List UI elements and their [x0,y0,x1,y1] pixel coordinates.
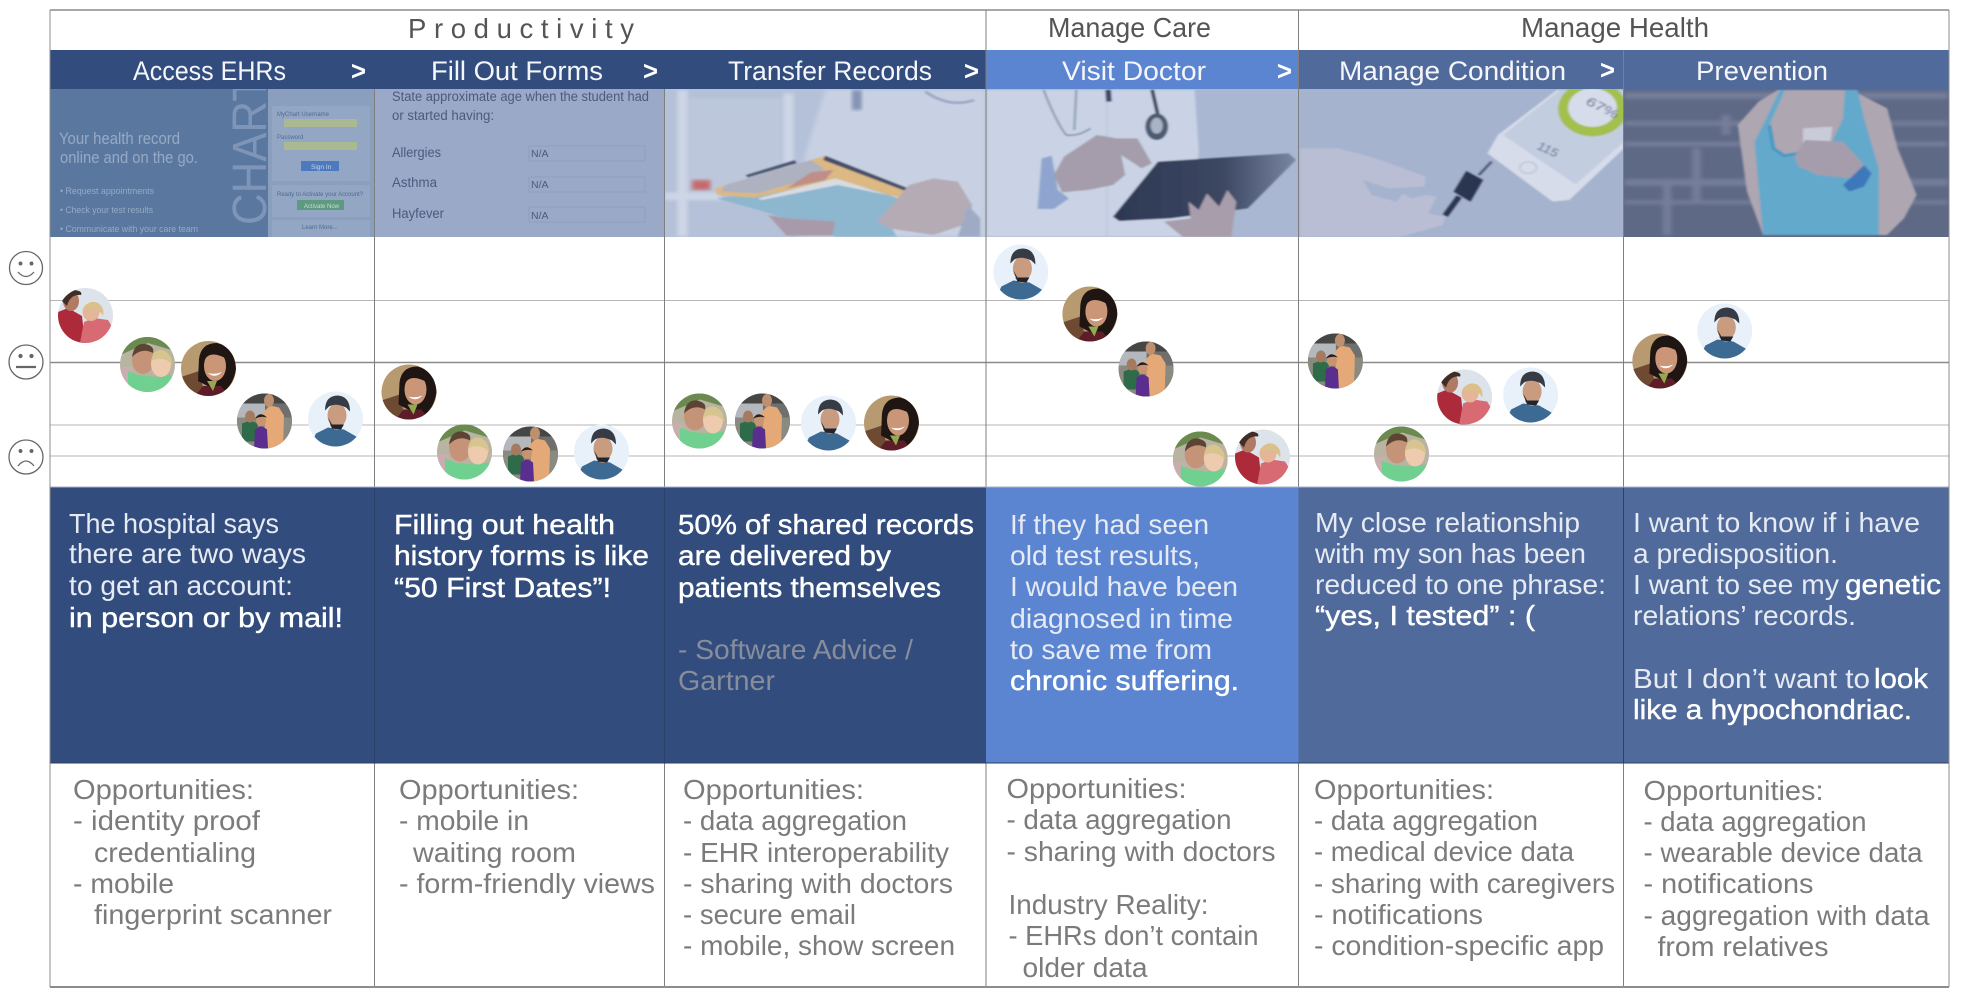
icon: sad face [9,440,43,474]
stage: Visit Doctor [1062,56,1292,86]
image: woman checking phone and wristband [1624,89,1949,237]
opportunities: Transfer Records: - sharing with doctors [683,868,953,899]
opportunities and industry reality: Visit Doctor [1006,773,1276,983]
image: health history form: N/A [531,148,549,160]
icon: neutral face [9,345,43,379]
opportunities: Fill Out Forms: - mobile in [399,805,529,836]
quote: Access EHRs: in person or by mail! [69,602,343,633]
quote: Visit Doctor: old test results, [1010,540,1200,571]
quote: Fill Out Forms: history forms is like [394,540,649,571]
stage: Manage Condition: Manage Condition [1339,56,1566,86]
quote: Transfer Records: Gartner [678,665,775,696]
stage: Access EHRs: > [351,56,366,86]
opportunities: Prevention [1644,775,1930,962]
opportunities: Access EHRs: Opportunities: [73,774,254,805]
opportunities: Access EHRs: - identity proof [73,805,260,836]
quote: Visit Doctor: diagnosed in time [1010,603,1233,634]
avatars: Prevention sentiment [1632,304,1752,388]
opportunities: Transfer Records: Opportunities: [683,774,864,805]
image: MyChart login screen: Sign In [311,164,332,171]
image: MyChart login screen: online and on the go. [60,148,198,167]
opportunities: Prevention: - wearable device data [1644,837,1923,868]
opportunities: Prevention: - notifications [1644,868,1814,899]
stage: Fill Out Forms: Fill Out Forms [431,56,603,86]
image: health history form: Hayfever [392,206,444,221]
quote: Access EHRs: to get an account: [69,570,293,601]
image: health history form: State approximate age when the student had [392,89,649,104]
image: MyChart login screen: Learn More... [302,225,338,231]
opportunities and industry reality: Visit Doctor: Opportunities: [1006,773,1186,804]
quote: Manage Condition: “yes, I tested” : ( [1315,600,1535,631]
quote: Prevention: look [1874,663,1928,694]
heading: Manage Health: Manage Health [1521,12,1709,43]
opportunities: Manage Condition: - sharing with caregivers [1314,868,1615,899]
image: glucose meter on phone: 67% [1582,95,1622,122]
opportunities: Prevention: from relatives [1658,931,1828,962]
avatars: Transfer Records sentiment [672,394,919,450]
quote: Transfer Records: patients themselves [678,572,941,603]
quote: Prevention [1633,507,1941,725]
quote: Prevention: a predisposition. [1633,538,1838,569]
image: health history form: or started having: [392,108,494,123]
avatars: Access EHRs sentiment [58,288,363,448]
image: MyChart login screen: CHART [224,75,277,225]
quote panels background [50,487,1949,763]
image: MyChart login screen: • Communicate with your care team [60,224,198,234]
opportunities: Manage Condition [1314,774,1615,961]
image: doctor holding folders [664,89,986,237]
opportunities: Prevention: Opportunities: [1644,775,1824,806]
quote: Manage Condition: My close relationship [1315,507,1580,538]
heading: Manage Care: Manage Care [1048,12,1211,43]
opportunities: Manage Condition: - data aggregation [1314,805,1538,836]
opportunities: Fill Out Forms: Opportunities: [399,774,579,805]
opportunities: Transfer Records: - secure email [683,899,856,930]
quote: Manage Condition [1314,507,1606,631]
opportunities and industry reality: Visit Doctor: older data [1022,952,1148,983]
opportunities: Transfer Records [683,774,955,961]
heading: Productivity: Productivity [408,13,634,44]
quote: Visit Doctor: If they had seen [1010,509,1209,540]
quote: Prevention: I want to see my [1633,569,1839,600]
stage: Prevention: Prevention [1696,56,1828,86]
quote: Visit Doctor: to save me from [1010,634,1212,665]
quote: Fill Out Forms: “50 First Dates”! [394,572,611,603]
stage: Transfer Records: > [964,56,979,86]
image: MyChart login screen: Your health record [59,129,180,148]
opportunities: Access EHRs: credentialing [94,837,256,868]
opportunities: Transfer Records: - EHR interoperability [683,837,949,868]
opportunities and industry reality: Visit Doctor: - data aggregation [1006,804,1232,835]
opportunities: Access EHRs: - mobile [73,868,174,899]
image: MyChart login screen: MyChart Username [277,112,330,118]
quote: Fill Out Forms [394,509,649,603]
quote: Transfer Records: - Software Advice / [678,634,913,665]
stage: Visit Doctor: Visit Doctor [1062,56,1206,86]
quote: Prevention: genetic [1845,569,1941,600]
quote: Prevention: But I don’t want to [1633,663,1870,694]
image: MyChart login screen: • Request appointments [60,186,154,196]
opportunities: Transfer Records: - mobile, show screen [683,930,955,961]
opportunities: Access EHRs: fingerprint scanner [94,899,332,930]
quote: Prevention: I want to know if i have [1633,507,1920,538]
stage: Access EHRs: Access EHRs [133,56,286,86]
image: MyChart login screen: Activate Now [304,204,340,210]
opportunities: Transfer Records: - data aggregation [683,805,907,836]
icon: happy face [10,252,42,284]
image: glucose meter on phone [1298,82,1627,237]
quote: Transfer Records: 50% of shared records [678,509,974,540]
avatars: Visit Doctor sentiment [993,244,1290,486]
quote: Visit Doctor [1010,509,1239,696]
image: doctor with tablet [986,89,1298,237]
opportunities and industry reality: Visit Doctor: - sharing with doctors [1006,836,1276,867]
image: health history form [374,89,664,237]
opportunities: Manage Condition: - condition-specific app [1314,930,1604,961]
image: MyChart login screen: Ready to Activate your Account? [277,191,363,198]
opportunities: Manage Condition: Opportunities: [1314,774,1494,805]
image: health history form: N/A [531,179,549,191]
quote: Transfer Records [678,509,974,696]
band: stage headers row [50,50,1949,89]
stage: Transfer Records: Transfer Records [728,56,932,86]
image: MyChart login screen [50,89,374,237]
image: health history form: Allergies [392,145,441,160]
opportunities: Prevention: - data aggregation [1644,806,1866,837]
opportunities: Access EHRs [73,774,332,930]
opportunities and industry reality: Visit Doctor: - EHRs don’t contain [1008,920,1258,951]
opportunities and industry reality: Visit Doctor: Industry Reality: [1008,889,1208,920]
avatars: Manage Condition sentiment [1308,334,1558,482]
quote: Access EHRs: The hospital says [69,508,279,539]
quote: Transfer Records: are delivered by [678,540,891,571]
quote: Access EHRs [69,508,343,633]
stage: Visit Doctor: > [1277,56,1292,86]
opportunities: Fill Out Forms [399,774,655,899]
opportunities: Manage Condition: - notifications [1314,899,1483,930]
avatars: Fill Out Forms sentiment [382,364,629,482]
image: health history form: Asthma [392,175,437,190]
image: glucose meter on phone: 115 [1534,139,1562,160]
quote: Fill Out Forms: Filling out health [394,509,615,540]
quote: Prevention: relations’ records. [1633,600,1856,631]
image: MyChart login screen: • Check your test results [60,205,153,215]
quote: Visit Doctor: I would have been [1010,571,1238,602]
stage: Fill Out Forms: > [643,56,658,86]
quote: Manage Condition: reduced to one phrase: [1315,569,1606,600]
quote: Prevention: like a hypochondriac. [1633,694,1912,725]
image: MyChart login screen: Password [277,135,303,141]
opportunities: Manage Condition: - medical device data [1314,836,1575,867]
quote: Access EHRs: there are two ways [69,538,306,569]
opportunities: Fill Out Forms: waiting room [412,837,576,868]
opportunities: Prevention: - aggregation with data [1644,900,1930,931]
image: health history form: N/A [531,210,549,222]
quote: Manage Condition: with my son has been [1314,538,1586,569]
opportunities: Fill Out Forms: - form-friendly views [399,868,655,899]
stage: Manage Condition: > [1600,55,1615,85]
quote: Visit Doctor: chronic suffering. [1010,665,1239,696]
